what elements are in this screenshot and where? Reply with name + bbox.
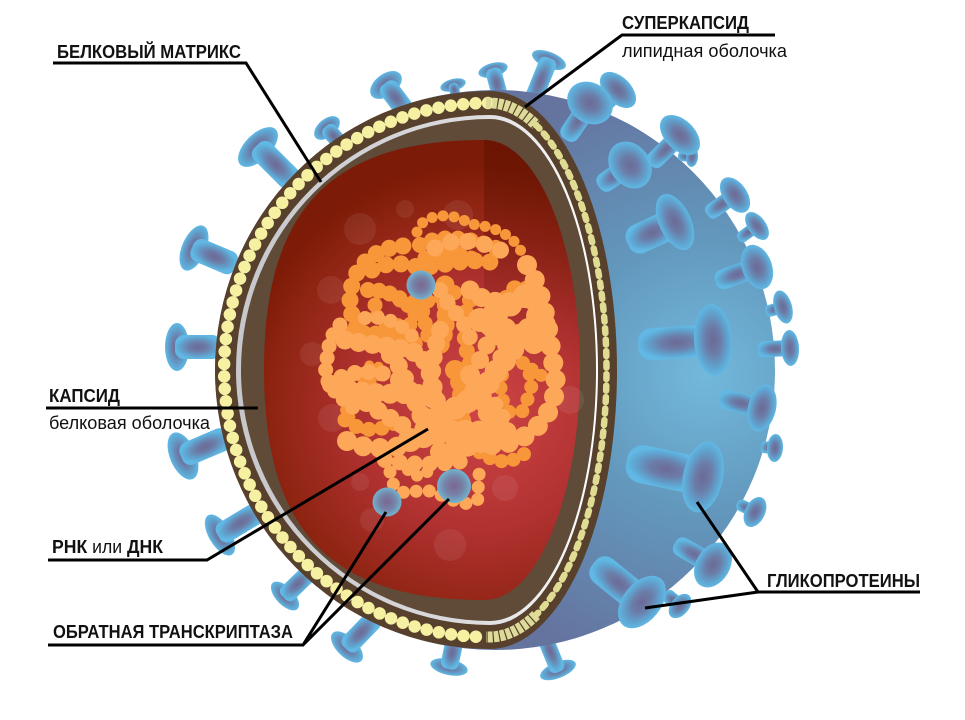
spike m [714,375,781,435]
label: superkapsid: СУПЕРКАПСИД [622,13,749,33]
spike s [656,582,696,623]
light bead strands [325,241,556,503]
spike 1 [231,120,312,201]
spike 14 [525,624,579,685]
spike r [575,540,676,637]
spike q [663,522,740,594]
lipid bilayer beads, right side [536,125,606,615]
spike 7 [174,221,246,288]
RNA or DNA coil of orange beads [325,216,556,503]
spike 10 [199,490,275,560]
darker interior shading on the right [484,140,580,370]
spike k [757,330,800,368]
spike l [636,303,734,381]
blue sphere: outer envelope [215,90,775,650]
transcriptase lower left [372,488,402,516]
spike j [761,288,796,328]
outer glycoprotein spikes behind the section [161,46,579,685]
capsid brown layer [241,119,596,621]
spike n [760,433,784,463]
spike 11 [266,558,323,615]
spike d [633,107,708,182]
spike p [730,489,771,531]
glycoprotein spikes on the sphere [545,65,800,637]
leader: glycoproteins [645,502,920,608]
label: reverse transcriptase: ОБРАТНАЯ ТРАНСКРИПТАЗА [53,622,293,642]
label: protein matrix: БЕЛКОВЫЙ МАТРИКС [57,41,241,62]
transcriptase lower right [437,469,471,503]
label: RNA or DNA: РНК или ДНК [52,537,164,557]
leader: superkapsid [525,35,775,107]
spike b [574,65,643,134]
spike a [545,73,621,153]
label: glycoproteins: ГЛИКОПРОТЕИНЫ [767,571,920,591]
spike 2 [310,111,354,156]
red interior [264,140,580,600]
spike 5 [477,59,515,103]
spike 4 [439,76,469,100]
superkapsid outer brown shell [215,91,617,649]
spike 3 [365,65,421,123]
leader: RNA or DNA [48,429,428,560]
grey matrix band [236,115,598,625]
spike 6 [514,46,569,111]
transcriptase top [406,270,436,300]
spike 12 [326,603,391,668]
dark bead strands [345,216,545,461]
label: protein shell: белковая оболочка [49,413,211,433]
cross-section of the virion [215,91,617,649]
spike i [708,240,779,304]
reverse transcriptase particles [372,270,471,516]
spike c [585,133,661,207]
spike 8 [165,323,221,371]
lipid bilayer beads, left side [224,103,488,637]
lipid bilayer beads, top foreshortened [486,103,536,125]
label: capsid: КАПСИД [49,386,120,406]
spike f [615,188,702,271]
spike 13 [429,632,474,679]
leader: capsid [46,406,258,410]
label: lipid envelope: липидная оболочка [622,41,788,61]
leader lines [46,35,920,645]
spike g [696,172,756,231]
spike o [619,426,730,516]
faint bubbles inside [300,200,584,561]
spike e [677,146,699,167]
lipid bilayer beads, bottom foreshortened [486,615,536,637]
leader: protein matrix [53,63,321,182]
spike h [729,208,774,252]
leader: reverse transcriptase [48,499,449,645]
spike 9 [161,413,239,484]
